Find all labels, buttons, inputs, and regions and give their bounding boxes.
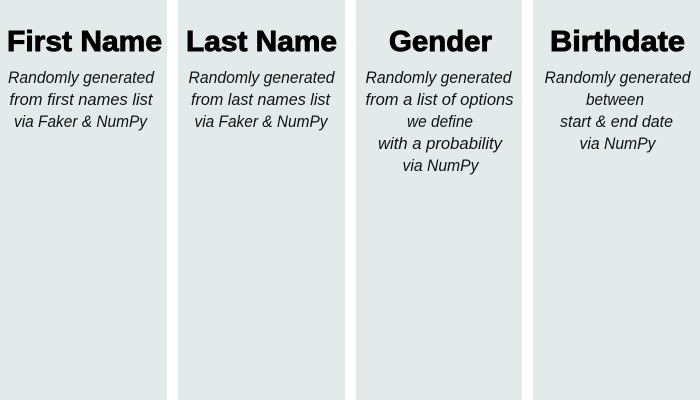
text block: Birthdate description: start & end date xyxy=(560,112,673,131)
text block: Birthdate description: Randomly generated xyxy=(544,68,691,87)
text block: First Name description: Randomly generated xyxy=(8,68,154,87)
text block: Gender description: from a list of options xyxy=(366,90,514,109)
text block: First Name description: from first names list xyxy=(10,90,154,109)
text block: Last Name description: Randomly generated xyxy=(188,68,335,87)
text block: Birthdate description: between xyxy=(586,90,644,109)
text block: Birthdate description: via NumPy xyxy=(580,134,657,153)
text block: First Name description xyxy=(8,68,154,131)
text block: Last Name description: from last names list xyxy=(191,90,331,109)
panel: Birthdate xyxy=(533,0,700,400)
heading: Gender: Gender xyxy=(389,26,492,58)
text block: Gender description: via NumPy xyxy=(402,156,480,175)
heading: Last Name: Last Name xyxy=(186,26,337,58)
panel: Gender xyxy=(356,0,522,400)
text block: Gender description: we define xyxy=(407,112,473,131)
text block: Last Name description: via Faker & NumPy xyxy=(194,112,329,131)
text block: Birthdate description xyxy=(544,68,691,153)
heading: Birthdate: Birthdate xyxy=(550,26,685,58)
panel: Last Name xyxy=(178,0,345,400)
text block: Gender description: with a probability xyxy=(378,134,503,153)
panel: First Name xyxy=(0,0,167,400)
text block: Gender description: Randomly generated xyxy=(366,68,512,87)
heading: First Name: First Name xyxy=(7,26,162,58)
text block: First Name description: via Faker & NumPy xyxy=(14,112,148,131)
text block: Gender description xyxy=(366,68,514,175)
text block: Last Name description xyxy=(188,68,335,131)
